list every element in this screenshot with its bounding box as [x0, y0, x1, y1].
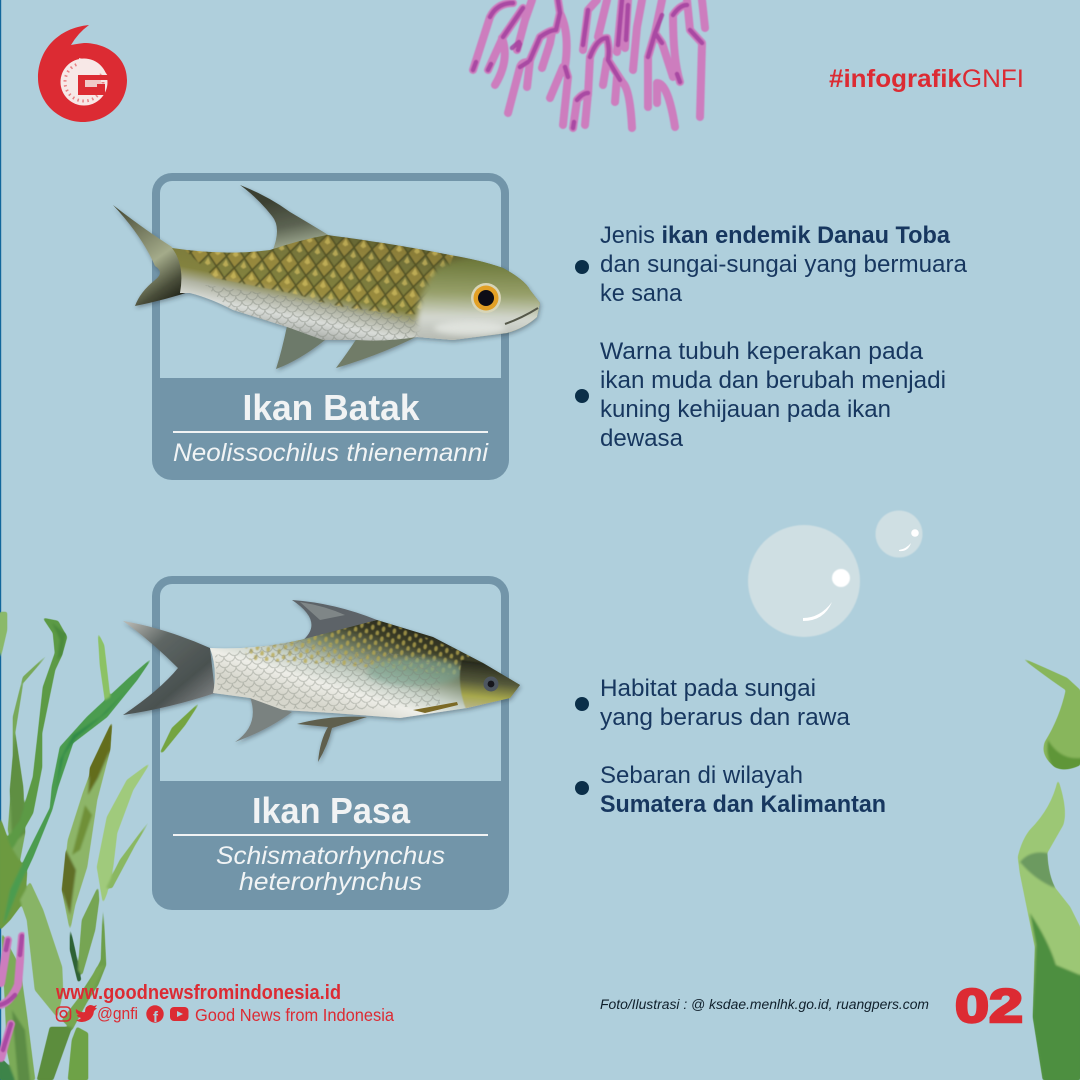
eye: [484, 676, 498, 692]
text block: Ikan Batak points: [575, 222, 968, 452]
bullet: [575, 389, 589, 403]
point 1: Habitat pada sungai: [600, 675, 816, 702]
mouth: [505, 308, 538, 324]
card frame: [152, 576, 509, 910]
rear fin: [235, 697, 292, 742]
body: [210, 620, 520, 718]
gill highlight: [434, 321, 506, 335]
text block: Ikan Pasa points: Sumatera dan Kalimantan: [600, 791, 886, 818]
teal sheen: [367, 658, 463, 686]
heading: Ikan Pasa: [252, 790, 411, 831]
handle: @gnfi: [97, 1004, 138, 1023]
text block: Ikan Pasa points: [575, 675, 886, 818]
icon: twitter: [76, 1005, 97, 1022]
footer: website and social: [55, 982, 394, 1026]
channel name: Good News from Indonesia: [195, 1005, 394, 1025]
dorsal fin: [240, 185, 330, 252]
icon: facebook: [146, 1005, 164, 1026]
bullet: [575, 260, 589, 274]
panel: Ikan Pasa: [152, 576, 509, 910]
left edge line: [0, 0, 1, 1080]
lower leaf: [1018, 780, 1080, 1080]
pectoral fin: [413, 702, 458, 713]
divider: [173, 834, 488, 836]
page number: 02: [955, 979, 1023, 1032]
anal fin: [336, 336, 418, 368]
fish: Ikan Batak: [113, 185, 550, 369]
markings: [215, 618, 525, 712]
text block: Ikan Pasa points: yang berarus dan rawa: [600, 704, 851, 731]
card frame: [152, 173, 509, 480]
icon: instagram: [56, 1007, 70, 1021]
text block: Ikan Batak points: dewasa: [600, 425, 684, 452]
bubbles: [748, 510, 922, 637]
pelvic fin: [276, 326, 325, 369]
text block: Ikan Batak points: ke sana: [600, 280, 683, 307]
heading: Ikan Batak: [242, 387, 420, 428]
logo emblem: [60, 58, 108, 106]
gold speckles: [240, 618, 470, 675]
tail: [123, 621, 215, 715]
silver scales: [205, 285, 430, 342]
eye: [471, 283, 501, 313]
logo drop shape: [38, 25, 127, 122]
point 2: Sebaran di wilayah: [600, 762, 803, 789]
bullet: [575, 697, 589, 711]
seaweed left: [0, 612, 200, 1080]
fish: Ikan Pasa: [123, 600, 525, 762]
bullet: [575, 781, 589, 795]
dorsal fin highlight: [300, 602, 345, 620]
panel: Ikan Pasa: heterorhynchus: [239, 868, 422, 896]
head: [413, 258, 540, 340]
text block: Ikan Batak points: dan sungai-sungai yang bermuara: [600, 251, 968, 278]
point 1: Jenis ikan endemik Danau Toba: [600, 222, 951, 249]
leaf fold: [1020, 852, 1055, 888]
website: www.goodnewsfromindonesia.id: [55, 982, 341, 1004]
scales: [185, 232, 455, 315]
icon: youtube: [170, 1007, 188, 1021]
text block: Ikan Batak points: kuning kehijauan pada ikan: [600, 396, 891, 423]
hashtag: #infografikGNFI: [829, 65, 1024, 93]
head: [459, 660, 520, 708]
seaweed right: [1018, 658, 1080, 1080]
coral left: [0, 936, 22, 1058]
point 2: Warna tubuh keperakan pada: [600, 338, 924, 365]
divider: [173, 431, 488, 433]
large bubble: [748, 525, 860, 637]
scales and head: [185, 232, 550, 345]
scientific name: Schismatorhynchus: [216, 842, 445, 870]
logo: [38, 25, 127, 122]
small bubble: [876, 510, 922, 558]
photo credit: Foto/Ilustrasi : @ ksdae.menlhk.go.id, ruangpers.com: [600, 997, 929, 1012]
leaf shadow: [1030, 913, 1080, 1080]
body: [172, 235, 540, 341]
scales: [215, 640, 440, 711]
panel: Ikan Batak: [152, 173, 509, 480]
upper leaf: [1022, 658, 1080, 769]
dorsal fin: [292, 600, 377, 641]
lower fins: [297, 717, 367, 762]
leaf tone: [1047, 740, 1080, 769]
tail: [113, 205, 195, 306]
text block: Ikan Batak points: ikan muda dan berubah menjadi: [600, 367, 946, 394]
scientific name: Neolissochilus thienemanni: [173, 439, 489, 467]
coral top: [473, 0, 705, 128]
icon: facebook: f: [153, 1009, 159, 1026]
